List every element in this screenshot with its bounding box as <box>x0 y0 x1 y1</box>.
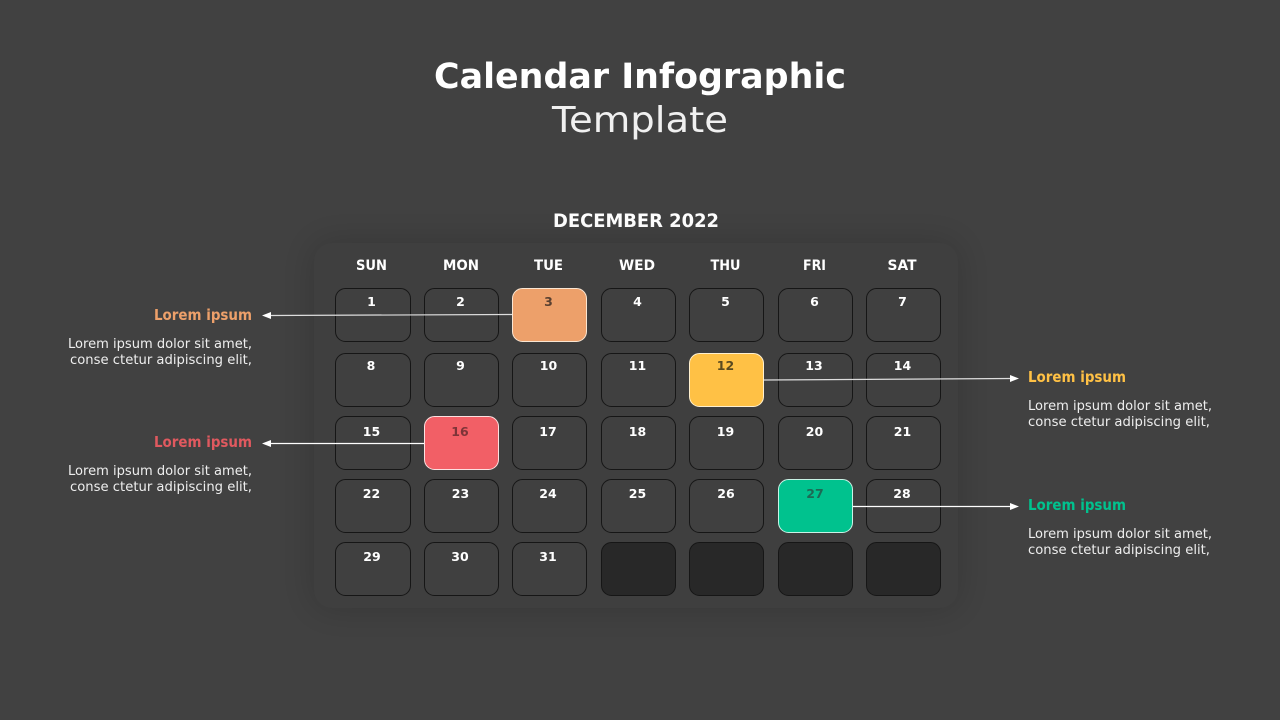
callout: orange <box>68 306 252 368</box>
highlighted date: 16 <box>424 416 498 470</box>
weekday headers: SUN <box>356 258 387 274</box>
date numbers: 6 <box>810 294 819 309</box>
date numbers: 29 <box>363 549 381 564</box>
date numbers: 19 <box>717 424 734 439</box>
date numbers: 1 <box>367 294 376 309</box>
date numbers: 26 <box>717 486 735 501</box>
date numbers: 16 <box>451 424 469 439</box>
weekday headers <box>356 258 917 274</box>
date grid <box>336 288 940 596</box>
callout: orange: Lorem ipsum dolor sit amet, <box>68 337 252 352</box>
callout: red: Lorem ipsum <box>154 433 252 451</box>
date numbers: 12 <box>717 358 734 373</box>
weekday headers: FRI <box>803 258 826 274</box>
callout: orange: conse ctetur adipiscing elit, <box>70 353 252 368</box>
callout: red: conse ctetur adipiscing elit, <box>70 480 252 495</box>
weekday headers: SAT <box>888 258 917 274</box>
date numbers: 8 <box>367 358 375 373</box>
date numbers: 28 <box>893 486 911 501</box>
date numbers: 25 <box>629 486 646 501</box>
title: Template <box>551 100 728 141</box>
weekday headers: TUE <box>534 258 563 274</box>
callout: green <box>1028 496 1212 558</box>
arrow: 16 to left label <box>262 440 424 447</box>
date numbers <box>363 294 911 564</box>
date numbers: 11 <box>629 358 646 373</box>
arrow: 12 to right label <box>764 375 1019 382</box>
highlighted date: 3 <box>512 288 586 342</box>
callout: red: Lorem ipsum dolor sit amet, <box>68 464 252 479</box>
highlighted date: 12 <box>690 354 764 406</box>
date numbers: 17 <box>539 424 557 439</box>
date numbers: 24 <box>539 486 557 501</box>
weekday headers: MON <box>443 258 479 274</box>
arrow: 27 to right label <box>853 503 1019 510</box>
title <box>434 57 846 141</box>
callout: green: Lorem ipsum <box>1028 496 1126 514</box>
highlighted date: 27 <box>778 480 852 532</box>
date numbers: 3 <box>544 294 553 309</box>
weekday headers: WED <box>619 258 655 274</box>
date numbers: 13 <box>805 358 823 373</box>
date numbers: 5 <box>721 294 730 309</box>
panel shadow <box>314 243 958 608</box>
date numbers: 10 <box>540 358 557 373</box>
callout: yellow: Lorem ipsum dolor sit amet, <box>1028 399 1212 414</box>
date numbers: 18 <box>629 424 646 439</box>
date numbers: 7 <box>898 294 907 309</box>
month heading: DECEMBER 2022 <box>553 211 719 232</box>
date numbers: 31 <box>539 549 557 564</box>
date numbers: 30 <box>451 549 469 564</box>
arrow: 3 to left label <box>262 312 512 319</box>
panel: calendar <box>314 243 958 608</box>
date numbers: 14 <box>894 358 911 373</box>
date numbers: 9 <box>456 358 465 373</box>
date numbers: 23 <box>452 486 469 501</box>
date numbers: 22 <box>363 486 380 501</box>
callout: yellow: conse ctetur adipiscing elit, <box>1028 415 1210 430</box>
callout: green: conse ctetur adipiscing elit, <box>1028 543 1210 558</box>
callout: orange: Lorem ipsum <box>154 306 252 324</box>
date numbers: 27 <box>806 486 824 501</box>
date numbers: 2 <box>456 294 465 309</box>
date numbers: 15 <box>363 424 380 439</box>
date numbers: 20 <box>806 424 823 439</box>
date numbers: 4 <box>633 294 642 309</box>
title: Calendar Infographic <box>434 57 846 97</box>
callout: red <box>68 433 252 495</box>
callout: green: Lorem ipsum dolor sit amet, <box>1028 527 1212 542</box>
date numbers: 21 <box>894 424 911 439</box>
callout: yellow: Lorem ipsum <box>1028 368 1126 386</box>
weekday headers: THU <box>710 258 740 274</box>
callout: yellow <box>1028 368 1212 430</box>
